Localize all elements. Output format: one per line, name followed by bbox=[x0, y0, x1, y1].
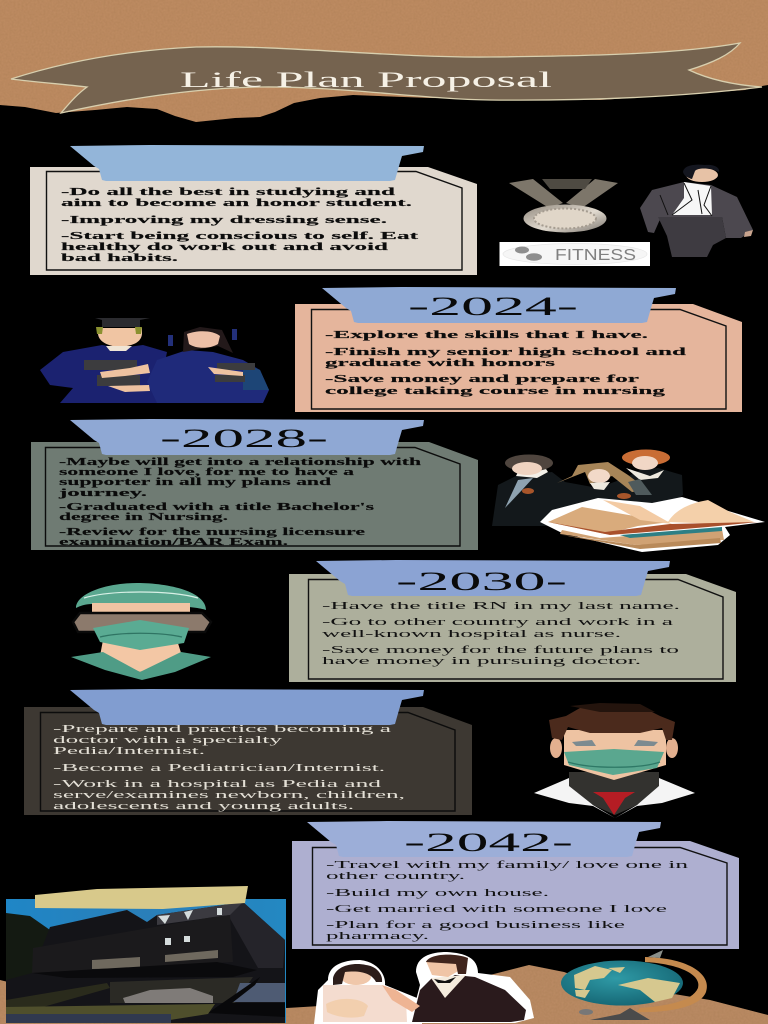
blank heading tape bbox=[70, 145, 424, 181]
panel: first goals bbox=[30, 145, 477, 275]
goals text: bad habits. bbox=[61, 253, 179, 264]
goals text: aim to become an honor student. bbox=[61, 198, 413, 209]
2028 goals text: someone I love, for me to have a bbox=[59, 467, 355, 478]
2024 goals text: -Explore the skills that I have. bbox=[325, 330, 649, 341]
heading tape 2030 bbox=[316, 560, 670, 596]
specialty goals text bbox=[53, 723, 406, 812]
2028 goals text: -Graduated with a title Bachelor's bbox=[59, 502, 374, 513]
heading tape 2028 bbox=[70, 419, 424, 455]
torn kraft paper footer bbox=[0, 965, 768, 1024]
icon: nurse bbox=[71, 583, 211, 680]
specialty goals text: -Prepare and practice becoming a bbox=[53, 723, 391, 735]
title banner bbox=[11, 43, 762, 113]
icon: globe bbox=[561, 950, 707, 1020]
specialty goals text: adolescents and young adults. bbox=[53, 800, 354, 812]
year 2024: -2024- bbox=[408, 292, 578, 321]
icon: graduates bbox=[40, 318, 269, 403]
goals text: -Do all the best in studying and bbox=[61, 187, 395, 198]
panel: 2024 bbox=[295, 287, 742, 412]
specialty goals text: -Become a Pediatrician/Internist. bbox=[53, 762, 385, 774]
2042 goals text bbox=[326, 859, 689, 942]
2028 goals text: journey. bbox=[57, 488, 148, 499]
fitness label: FITNESS bbox=[555, 247, 636, 264]
torn kraft paper header bbox=[0, 0, 768, 122]
icon: man in suit bbox=[640, 165, 753, 257]
panel: specialty goals bbox=[24, 689, 472, 815]
2030 goals text: -Have the title RN in my last name. bbox=[322, 600, 680, 612]
specialty goals text: doctor with a specialty bbox=[53, 734, 283, 746]
heading tape 2024 bbox=[322, 287, 676, 323]
goals text: healthy do work out and avoid bbox=[61, 242, 388, 253]
year 2042: -2042- bbox=[404, 828, 573, 857]
icon: doctor bbox=[534, 703, 695, 818]
icon: stack of open books bbox=[540, 497, 765, 552]
2042 goals text: -Travel with my family/ love one in bbox=[326, 859, 689, 871]
2042 goals text: other country. bbox=[326, 870, 465, 882]
goals text: -Improving my dressing sense. bbox=[61, 215, 388, 226]
blank heading tape bbox=[70, 689, 424, 725]
2042 goals text: pharmacy. bbox=[326, 930, 429, 942]
2024 goals text: graduate with honors bbox=[325, 358, 555, 369]
icon: medal bbox=[509, 179, 618, 232]
icon: wedding couple bbox=[314, 952, 534, 1024]
2030 goals text: -Save money for the future plans to bbox=[322, 644, 679, 656]
2030 goals text: -Go to other country and work in a bbox=[322, 616, 673, 628]
panel: 2028 bbox=[31, 419, 478, 550]
goals text bbox=[61, 187, 419, 264]
2028 goals text: examination/BAR Exam. bbox=[59, 537, 289, 548]
2030 goals text: well-known hospital as nurse. bbox=[322, 628, 621, 640]
2042 goals text: -Plan for a good business like bbox=[326, 919, 625, 931]
2030 goals text: have money in pursuing doctor. bbox=[322, 655, 641, 667]
2028 goals text: supporter in all my plans and bbox=[59, 477, 331, 488]
panel: 2042 bbox=[292, 821, 739, 949]
year 2028: -2028- bbox=[160, 424, 328, 453]
specialty goals text: Pedia/Internist. bbox=[53, 745, 205, 757]
2024 goals text: -Save money and prepare for bbox=[325, 374, 640, 385]
2028 goals text: -Maybe will get into a relationship with bbox=[59, 457, 421, 468]
title text: Life Plan Proposal bbox=[180, 67, 552, 92]
year 2030: -2030- bbox=[396, 567, 567, 596]
specialty goals text: serve/examines newborn, children, bbox=[53, 789, 406, 801]
2042 goals text: -Get married with someone I love bbox=[326, 903, 667, 915]
goals text: -Start being conscious to self. Eat bbox=[61, 231, 419, 242]
2024 goals text bbox=[325, 330, 686, 397]
2042 goals text: -Build my own house. bbox=[326, 887, 549, 899]
2024 goals text: college taking course in nursing bbox=[325, 386, 667, 397]
2030 goals text bbox=[322, 600, 680, 667]
2028 goals text: degree in Nursing. bbox=[59, 512, 229, 523]
cream tape over house bbox=[35, 886, 248, 909]
photo: modern house bbox=[6, 899, 286, 1023]
icon: fitness card bbox=[500, 242, 650, 266]
2024 goals text: -Finish my senior high school and bbox=[325, 347, 686, 358]
specialty goals text: -Work in a hospital as Pedia and bbox=[53, 778, 382, 790]
icon: three students bbox=[492, 450, 683, 526]
2028 goals text: -Review for the nursing licensure bbox=[59, 527, 366, 538]
2028 goals text bbox=[57, 457, 421, 548]
panel: 2030 bbox=[289, 560, 736, 682]
heading tape 2042 bbox=[307, 821, 661, 857]
